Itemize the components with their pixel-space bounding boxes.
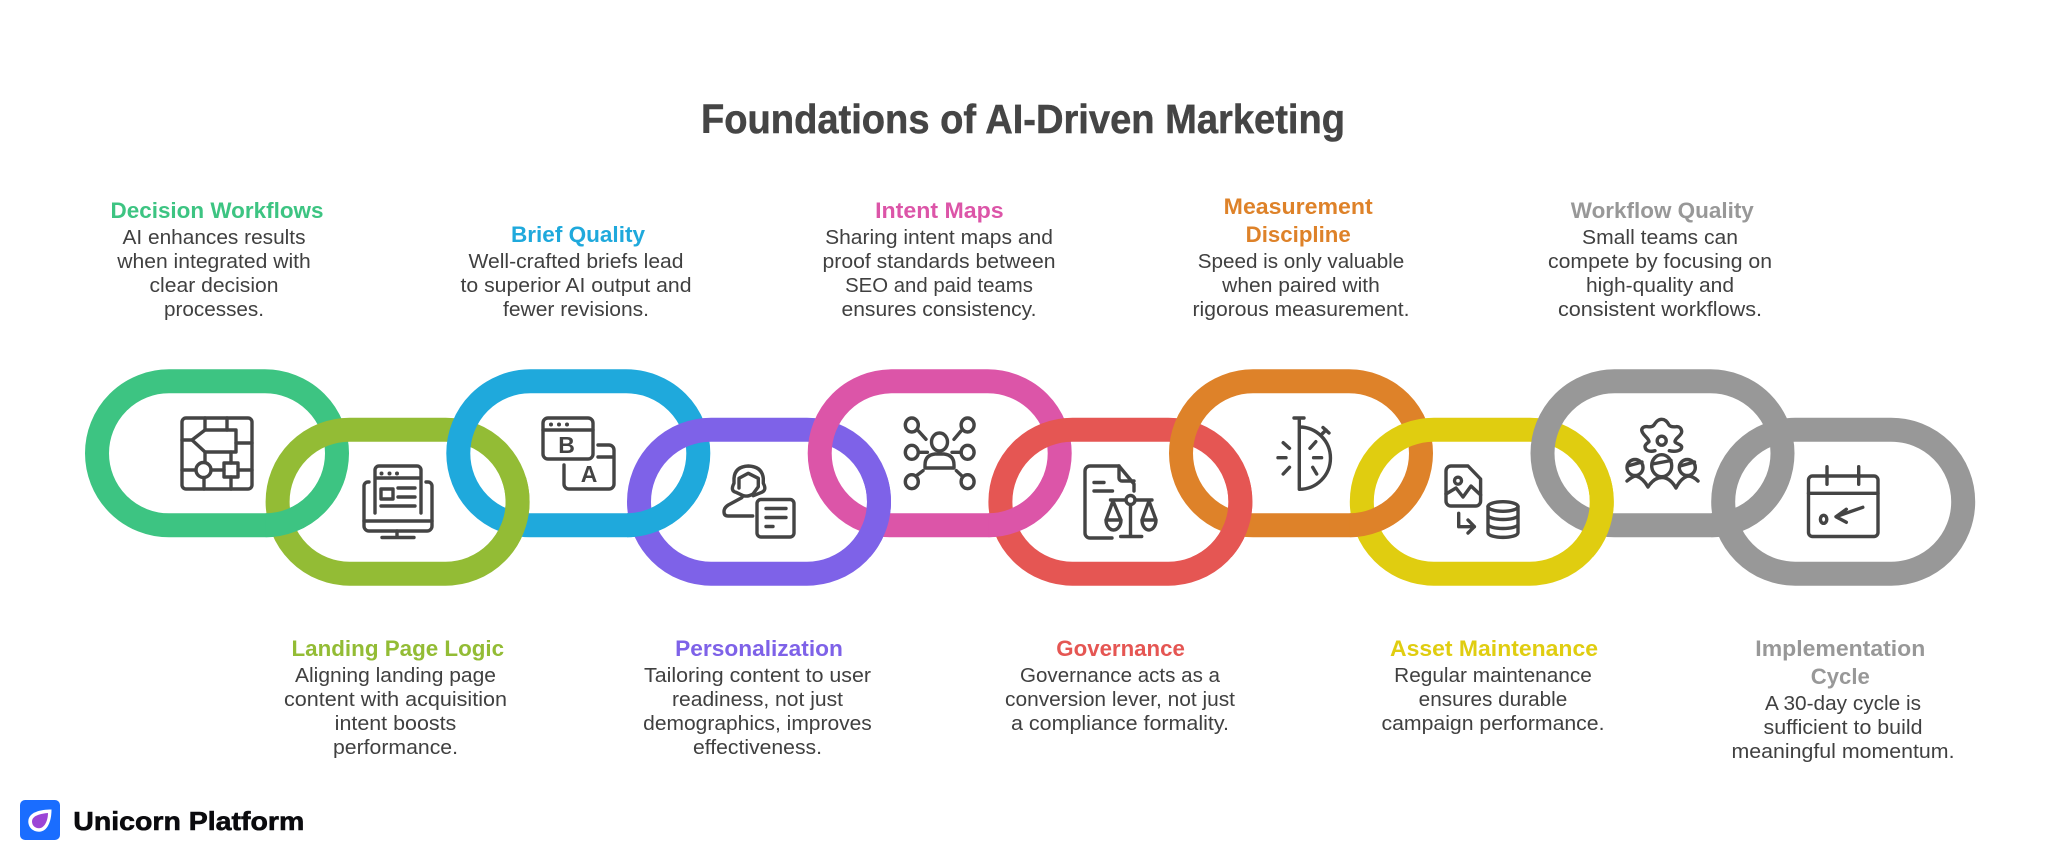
icon: logo mark (20, 800, 60, 840)
text block: Landing Page Logic: Aligning landing page (295, 665, 496, 687)
text block: Personalization: demographics, improves (643, 713, 872, 735)
text block: Workflow Quality: consistent workflows. (1558, 299, 1762, 321)
text block: Implementation Cycle: A 30-day cycle is (1765, 693, 1921, 715)
icon: A/B test windows: A (581, 461, 597, 487)
icon: document with scales (1085, 466, 1156, 538)
chain of interlocked links (97, 381, 1963, 574)
text block: Decision Workflows: clear decision (150, 275, 278, 297)
text block: Implementation Cycle: meaningful momentum. (1732, 741, 1954, 763)
text block: Workflow Quality: Small teams can (1582, 227, 1738, 249)
text block: Intent Maps: ensures consistency. (842, 299, 1036, 321)
link: Governance (1000, 430, 1240, 574)
text block: Workflow Quality: high-quality and (1586, 275, 1734, 297)
text block: Brief Quality: fewer revisions. (503, 299, 649, 321)
text block: Landing Page Logic: content with acquisition (284, 689, 507, 711)
text block: Measurement Discipline: Discipline (1246, 222, 1351, 247)
text block: Personalization: effectiveness. (693, 737, 822, 759)
logo wordmark: Unicorn Platform (73, 806, 304, 836)
text block: Asset Maintenance: Regular maintenance (1394, 665, 1592, 687)
text block: Intent Maps: SEO and paid teams (845, 275, 1033, 297)
text block: Measurement Discipline (1192, 194, 1410, 321)
link: Brief Quality (458, 381, 698, 525)
text block: Landing Page Logic (284, 636, 507, 759)
text block: Brief Quality: Brief Quality (511, 222, 646, 247)
text block: Asset Maintenance: Asset Maintenance (1390, 636, 1598, 661)
text block: Intent Maps (822, 198, 1056, 321)
icon: image file to database (1446, 466, 1518, 537)
text block: Workflow Quality: Workflow Quality (1571, 198, 1755, 223)
text block: Decision Workflows: when integrated with (116, 251, 311, 273)
text block: Decision Workflows: AI enhances results (122, 227, 306, 249)
link: Implementation Cycle (1723, 430, 1963, 574)
text block: Implementation Cycle (1732, 636, 1954, 763)
text block: Decision Workflows (110, 198, 324, 321)
text block: Governance: a compliance formality. (1011, 713, 1229, 735)
text block: Workflow Quality (1548, 198, 1772, 321)
icon: team with gear (1627, 419, 1698, 488)
text block: Governance: Governance acts as a (1020, 665, 1221, 687)
text block: Asset Maintenance: campaign performance. (1382, 713, 1604, 735)
text block: Measurement Discipline: rigorous measurement. (1192, 299, 1410, 321)
text block: Measurement Discipline: Speed is only valuable (1198, 251, 1404, 273)
text block: Brief Quality (460, 222, 692, 321)
text block: Asset Maintenance (1382, 636, 1604, 735)
lower crossings where the earlier link passes over (266, 477, 1791, 557)
icon: person with profile document (724, 466, 794, 537)
icon: half stopwatch (1278, 418, 1330, 489)
link: Workflow Quality (1542, 381, 1782, 525)
text block: Intent Maps: Intent Maps (875, 198, 1004, 223)
title: Foundations of AI-Driven Marketing (701, 96, 1345, 142)
text block: Personalization (643, 636, 872, 759)
text block: Measurement Discipline: when paired with (1221, 275, 1380, 297)
text block: Governance: Governance (1056, 636, 1185, 661)
link: Personalization (639, 430, 879, 574)
text block: Brief Quality: Well-crafted briefs lead (468, 251, 684, 273)
text block: Implementation Cycle: sufficient to build (1764, 717, 1922, 739)
text block: Landing Page Logic: Landing Page Logic (291, 636, 504, 661)
text block: Decision Workflows: Decision Workflows (110, 198, 324, 223)
text block: Landing Page Logic: performance. (333, 737, 458, 759)
icon: intent map network (905, 418, 974, 489)
text block: Governance (1005, 636, 1235, 735)
icon: A/B test windows: B (558, 432, 575, 458)
text block: Measurement Discipline: Measurement (1224, 194, 1373, 219)
icon: A/B test windows (543, 418, 614, 489)
text block: Personalization: readiness, not just (672, 689, 843, 711)
link: Decision Workflows (97, 381, 337, 525)
link: Landing Page Logic (278, 430, 518, 574)
link: Asset Maintenance (1362, 430, 1602, 574)
link: Measurement Discipline (1181, 381, 1421, 525)
link: Intent Maps (820, 381, 1060, 525)
text block: Personalization: Tailoring content to user (644, 665, 871, 687)
text block: Decision Workflows: processes. (164, 299, 264, 321)
text block: Governance: conversion lever, not just (1005, 689, 1235, 711)
text block: Asset Maintenance: ensures durable (1419, 689, 1567, 711)
text block: Landing Page Logic: intent boosts (335, 713, 456, 735)
text block: Workflow Quality: compete by focusing on (1548, 251, 1772, 273)
icon: landing page on monitor (364, 466, 432, 538)
text block: Implementation Cycle: Implementation (1755, 636, 1925, 661)
text block: Intent Maps: proof standards between (822, 251, 1056, 273)
text block: Personalization: Personalization (675, 636, 843, 661)
icon: calendar with arrow (1808, 467, 1878, 536)
text block: Brief Quality: to superior AI output and (460, 275, 692, 297)
text block: Intent Maps: Sharing intent maps and (825, 227, 1053, 249)
logo: Unicorn Platform (20, 800, 304, 840)
icon: decision flowchart (182, 418, 252, 489)
text block: Implementation Cycle: Cycle (1811, 664, 1870, 689)
